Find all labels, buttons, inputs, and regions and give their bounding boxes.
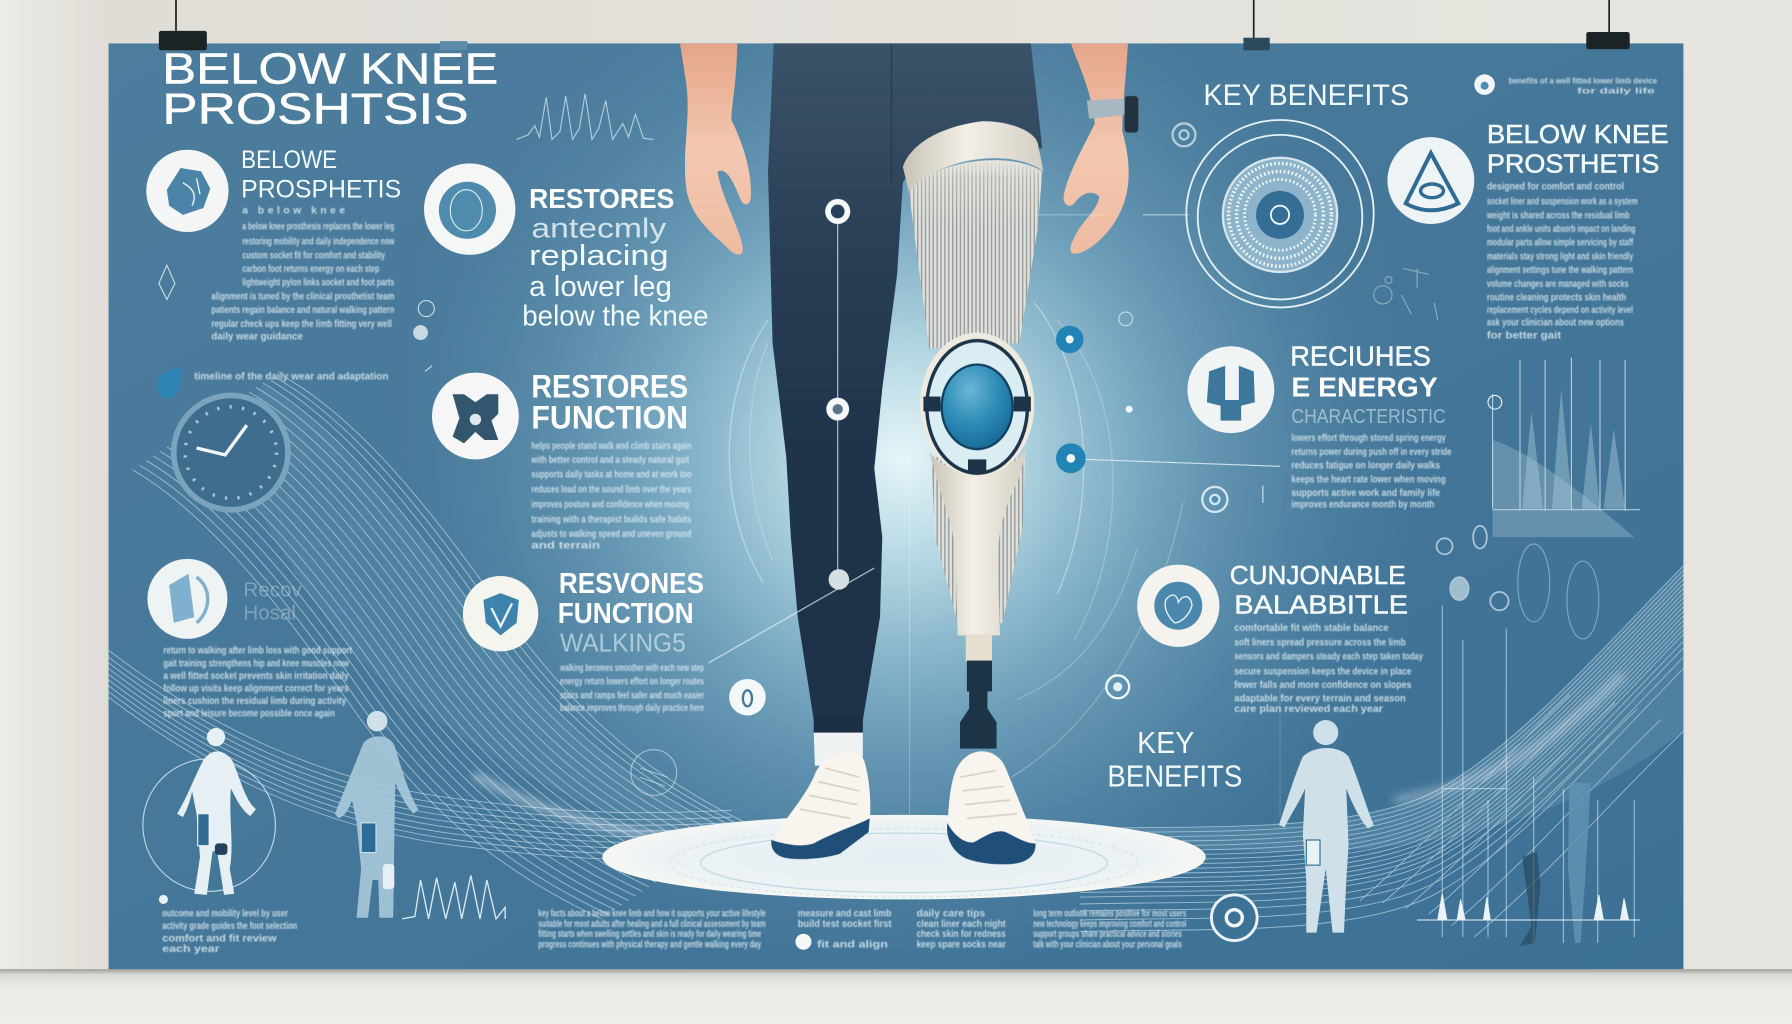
bottom text block 1: suitable for most adults after healing and a full clinical assessment by team <box>538 919 766 930</box>
body text: modular parts allow simple servicing by staff <box>1487 238 1634 249</box>
caption bottom left: comfort and fit review <box>162 934 277 945</box>
body text: carbon foot returns energy on each step <box>242 264 379 275</box>
heading: key benefits lower: KEY <box>1137 725 1194 760</box>
body text: energy return lowers effort on longer routes <box>560 677 704 688</box>
body text: lowers effort through stored spring energy <box>1291 433 1446 444</box>
caption bottom left: each year <box>162 944 219 955</box>
wave mesh: right <box>1080 566 1683 937</box>
floor <box>0 969 1792 1024</box>
central figure <box>680 43 1138 864</box>
left arm <box>680 43 751 255</box>
heading: RESVONES <box>559 568 704 600</box>
bottom text block 2: fit and align <box>817 939 888 950</box>
bottom text block 2: build test socket first <box>798 919 892 930</box>
blue markers right of knee <box>1034 215 1280 473</box>
icon: circle badge 1 <box>146 150 229 232</box>
heading: key benefits lower <box>1107 725 1242 793</box>
body text: reduces fatigue on longer daily walks <box>1291 461 1440 472</box>
faded heading: Hosal <box>243 601 296 624</box>
body text: soft liners spread pressure across the limb <box>1234 638 1406 649</box>
icon: clock <box>174 395 288 510</box>
body text: reduces load on the sound limb over the years <box>531 485 692 496</box>
heading <box>1290 341 1446 428</box>
body text <box>1291 433 1452 510</box>
body text: weight is shared across the residual limb <box>1486 210 1630 221</box>
bottom text block 4: new technology keeps improving comfort and control <box>1033 919 1186 930</box>
caption bottom left: outcome and mobility level by user <box>162 909 288 920</box>
body text: volume changes are managed with socks <box>1487 279 1629 290</box>
title: PROSHTSIS <box>162 85 469 133</box>
body text <box>559 663 704 714</box>
bottom text block 1: progress continues with physical therapy and gentle walking every day <box>538 939 761 950</box>
body text: lightweight pylon links socket and foot parts <box>242 278 394 289</box>
heading <box>241 146 401 204</box>
body text: adaptable for every terrain and season <box>1234 694 1406 705</box>
marker 1 <box>825 199 850 224</box>
icon: circle badge 6 <box>463 576 538 651</box>
body text: follow up visits keep alignment correct for years <box>163 683 349 694</box>
body text <box>1234 623 1423 715</box>
figure right <box>1279 720 1374 933</box>
heading: FUNCTION <box>558 598 694 630</box>
figure with circle, left <box>143 728 275 895</box>
heading and statement: replacing <box>529 240 669 272</box>
title: BELOW KNEE <box>162 45 498 93</box>
poster panel <box>109 43 1683 969</box>
icon: circle badge energy <box>1187 346 1274 433</box>
body text: secure suspension keeps the device in place <box>1234 666 1412 677</box>
leggings <box>768 43 1042 720</box>
heading: BELOWE <box>241 146 337 174</box>
icon: triangle badge <box>1387 137 1474 224</box>
body text: improves endurance month by month <box>1291 499 1434 510</box>
body text: ask your clinician about new options <box>1487 318 1624 329</box>
small sketches between panels <box>1374 269 1438 320</box>
heading and statement: a lower leg <box>529 271 672 303</box>
heading: PROSTHETIS <box>1487 149 1659 179</box>
panel: below knee prosthetis right <box>1387 119 1669 341</box>
ankle adapter <box>960 661 997 749</box>
body text: regular check ups keep the limb fitting very well <box>211 319 392 330</box>
small outline emblem <box>631 750 677 795</box>
target diagram <box>1186 120 1374 307</box>
small rings middle right <box>1202 486 1263 512</box>
body text: returns power during push off in every stride <box>1291 447 1452 458</box>
body text: keeps the heart rate lower when moving <box>1291 474 1446 485</box>
bottom text block 3: check skin for redness <box>917 929 1006 940</box>
faded heading: Recov <box>243 579 302 602</box>
leg left <box>1520 851 1541 946</box>
body text: materials stay strong light and skin friendly <box>1487 251 1633 262</box>
heading and statement <box>522 183 709 333</box>
icon: heart badge <box>1137 565 1219 647</box>
bottom text block 4: long term outlook remains positive for most users <box>1033 909 1186 920</box>
wave mesh: left hill <box>133 378 755 919</box>
heading: BALABBITLE <box>1234 590 1408 620</box>
bottom text block 1: fitting starts when swelling settles and skin is ready for daily wearing time <box>538 929 761 940</box>
body text: helps people stand walk and climb stairs again <box>531 441 691 452</box>
bottom text block 3: clean liner each night <box>917 919 1006 930</box>
title <box>162 45 498 133</box>
body text: improves posture and confidence when moving <box>531 499 689 510</box>
body text: replacement cycles depend on activity level <box>1487 305 1633 316</box>
body text <box>211 206 394 342</box>
bottom text block 4 <box>1033 909 1186 950</box>
bottom text block 2: measure and cast limb <box>798 909 891 920</box>
platform <box>602 815 1206 899</box>
body text: supports daily tasks at home and at work too <box>531 470 691 481</box>
wave mesh: lower left <box>109 650 731 860</box>
figure standing, center left <box>335 711 418 918</box>
marker 3 <box>829 569 849 590</box>
body text: care plan reviewed each year <box>1234 704 1383 715</box>
heading and statement: below the knee <box>522 301 709 333</box>
right arm <box>1064 43 1129 254</box>
body text: fewer falls and more confidence on slopes <box>1234 680 1412 691</box>
glowing ribbon right <box>1394 674 1623 800</box>
heading: WALKING5 <box>560 627 686 657</box>
small spike chart <box>402 875 505 919</box>
left shoe <box>771 752 870 859</box>
body text: a below knee prosthesis replaces the lower leg <box>242 222 394 233</box>
icon: small ring <box>1173 123 1195 146</box>
ring icon bottom <box>1211 895 1257 941</box>
heading: RESTORES <box>531 369 688 405</box>
bottom text block 1 <box>538 909 766 950</box>
body text: sport and leisure become possible once again <box>163 709 335 720</box>
heading and statement: antecmly <box>531 213 667 244</box>
body text <box>163 646 352 720</box>
heading <box>558 568 704 657</box>
body text: walking becomes smoother with each new step <box>559 663 704 674</box>
heading <box>1487 119 1669 179</box>
sock <box>814 731 863 766</box>
baseline spikes <box>1417 894 1640 920</box>
body text: return to walking after limb loss with good support <box>163 646 352 657</box>
panel: restores function walking <box>463 568 704 714</box>
bottom text block 1: key facts about a below knee limb and how it supports your active lifestyle <box>538 909 766 920</box>
heading: key benefits top: KEY BENEFITS <box>1203 79 1409 112</box>
body text: foot and ankle units absorb impact on landing <box>1487 224 1635 235</box>
marker 2 <box>826 398 849 421</box>
small icons far right <box>1437 526 1599 639</box>
shank cream <box>929 448 1027 635</box>
heading <box>531 369 688 436</box>
small ring marker <box>1106 675 1129 698</box>
body text: socket liner and suspension work as a system <box>1487 197 1638 208</box>
body text: daily wear guidance <box>211 331 303 342</box>
faded heading <box>243 579 302 624</box>
bottom text block 2 <box>795 909 892 950</box>
icon: circle badge 5 <box>147 559 227 639</box>
bottom text block 4: support groups share practical advice and stories <box>1033 929 1182 940</box>
panel: restores replacing <box>424 163 709 333</box>
socket fade <box>909 160 1042 229</box>
caption bottom left: activity grade guides the foot selection <box>162 921 297 932</box>
body text: with better control and a steady natural gait <box>531 455 690 466</box>
body text: stairs and ramps feel safer and much easier <box>560 690 704 701</box>
knee brackets <box>923 397 1031 472</box>
heading: PROSPHETIS <box>241 176 401 204</box>
bottom text block 3: daily care tips <box>917 909 985 920</box>
body text: adjusts to walking speed and uneven ground <box>531 529 691 540</box>
prosthetic socket stripes <box>909 160 1042 349</box>
caption bottom left <box>159 895 297 955</box>
heading <box>1230 560 1408 620</box>
heading: E ENERGY <box>1291 372 1438 403</box>
bottom text block 4: talk with your clinician about your personal goals <box>1033 939 1182 950</box>
body text: alignment settings tune the walking pattern <box>1487 265 1633 276</box>
panel: cunjonable balabbitle <box>1137 560 1423 715</box>
body text: routine cleaning protects skin health <box>1487 293 1626 304</box>
body text: comfortable fit with stable balance <box>1234 623 1389 634</box>
body text: alignment is tuned by the clinical prosthetist team <box>211 291 394 302</box>
icon: circle badge 2 <box>424 163 515 255</box>
body text: supports active work and family life <box>1291 488 1440 499</box>
body text: a below knee <box>242 206 345 217</box>
body text: and terrain <box>531 541 600 552</box>
body text: patients regain balance and natural walking pattern <box>211 305 394 316</box>
shank stripes <box>931 457 1025 623</box>
heading: RECIUHES <box>1290 341 1431 372</box>
heading: FUNCTION <box>531 400 688 436</box>
right chart with legs <box>1417 606 1640 946</box>
body text: liners cushion the residual limb during activity <box>163 696 347 707</box>
icon: circle badge 3 <box>432 373 519 459</box>
heading and statement: RESTORES <box>529 183 674 214</box>
icon: drop badge <box>157 368 183 399</box>
body text: training with a therapist builds safe habits <box>531 514 692 525</box>
top right note: for daily life <box>1577 87 1656 96</box>
bottom text block 3 <box>917 909 1006 950</box>
body text: gait training strengthens hip and knee muscles now <box>163 658 349 669</box>
knee housing <box>920 333 1034 477</box>
body text: sensors and dampers steady each step taken today <box>1234 651 1423 662</box>
hanging clips <box>159 0 1630 50</box>
pylon <box>966 634 992 662</box>
legging cuff <box>814 718 863 733</box>
body text <box>1486 182 1638 341</box>
body text <box>531 441 692 552</box>
small caption near clock: timeline of the daily wear and adaptation <box>194 371 389 382</box>
energy bar chart <box>1488 358 1640 537</box>
concentric arcs around the knee <box>729 303 1183 777</box>
bottom text block 3: keep spare socks near <box>917 939 1006 950</box>
heading: CHARACTERISTIC <box>1291 405 1446 428</box>
body text: for better gait <box>1487 330 1562 341</box>
heading: BELOW KNEE <box>1487 119 1669 149</box>
knee ring <box>927 341 1027 473</box>
seam <box>890 43 892 183</box>
pulse chart top <box>517 94 654 139</box>
callout points on leg <box>709 199 874 715</box>
panel: reduces energy <box>1187 341 1452 510</box>
small floating icons top left <box>159 265 434 371</box>
top right note <box>1474 74 1658 96</box>
body text: balance improves through daily practice here <box>560 703 704 714</box>
heading: CUNJONABLE <box>1230 560 1406 590</box>
body text: custom socket fit for comfort and stability <box>242 250 385 261</box>
prosthetic band <box>903 121 1043 191</box>
panel: below prosthetis <box>146 146 401 342</box>
body text: restoring mobility and daily independence now <box>242 237 394 248</box>
marker drop <box>729 679 766 715</box>
watch <box>1087 96 1138 133</box>
vertical guide line on platform side <box>909 457 911 817</box>
top right note: benefits of a well fitted lower limb device <box>1509 76 1658 85</box>
right shoe <box>947 751 1036 864</box>
body text: designed for comfort and control <box>1487 182 1624 193</box>
panel: lower left recovery <box>147 559 352 720</box>
panel: restores function <box>432 369 692 552</box>
glowing ribbon left <box>474 775 720 843</box>
leg right <box>1568 783 1591 943</box>
heading: key benefits lower: BENEFITS <box>1107 758 1242 793</box>
knee blue ball <box>942 365 1013 449</box>
body text: a well fitted socket prevents skin irritation daily <box>163 671 349 682</box>
